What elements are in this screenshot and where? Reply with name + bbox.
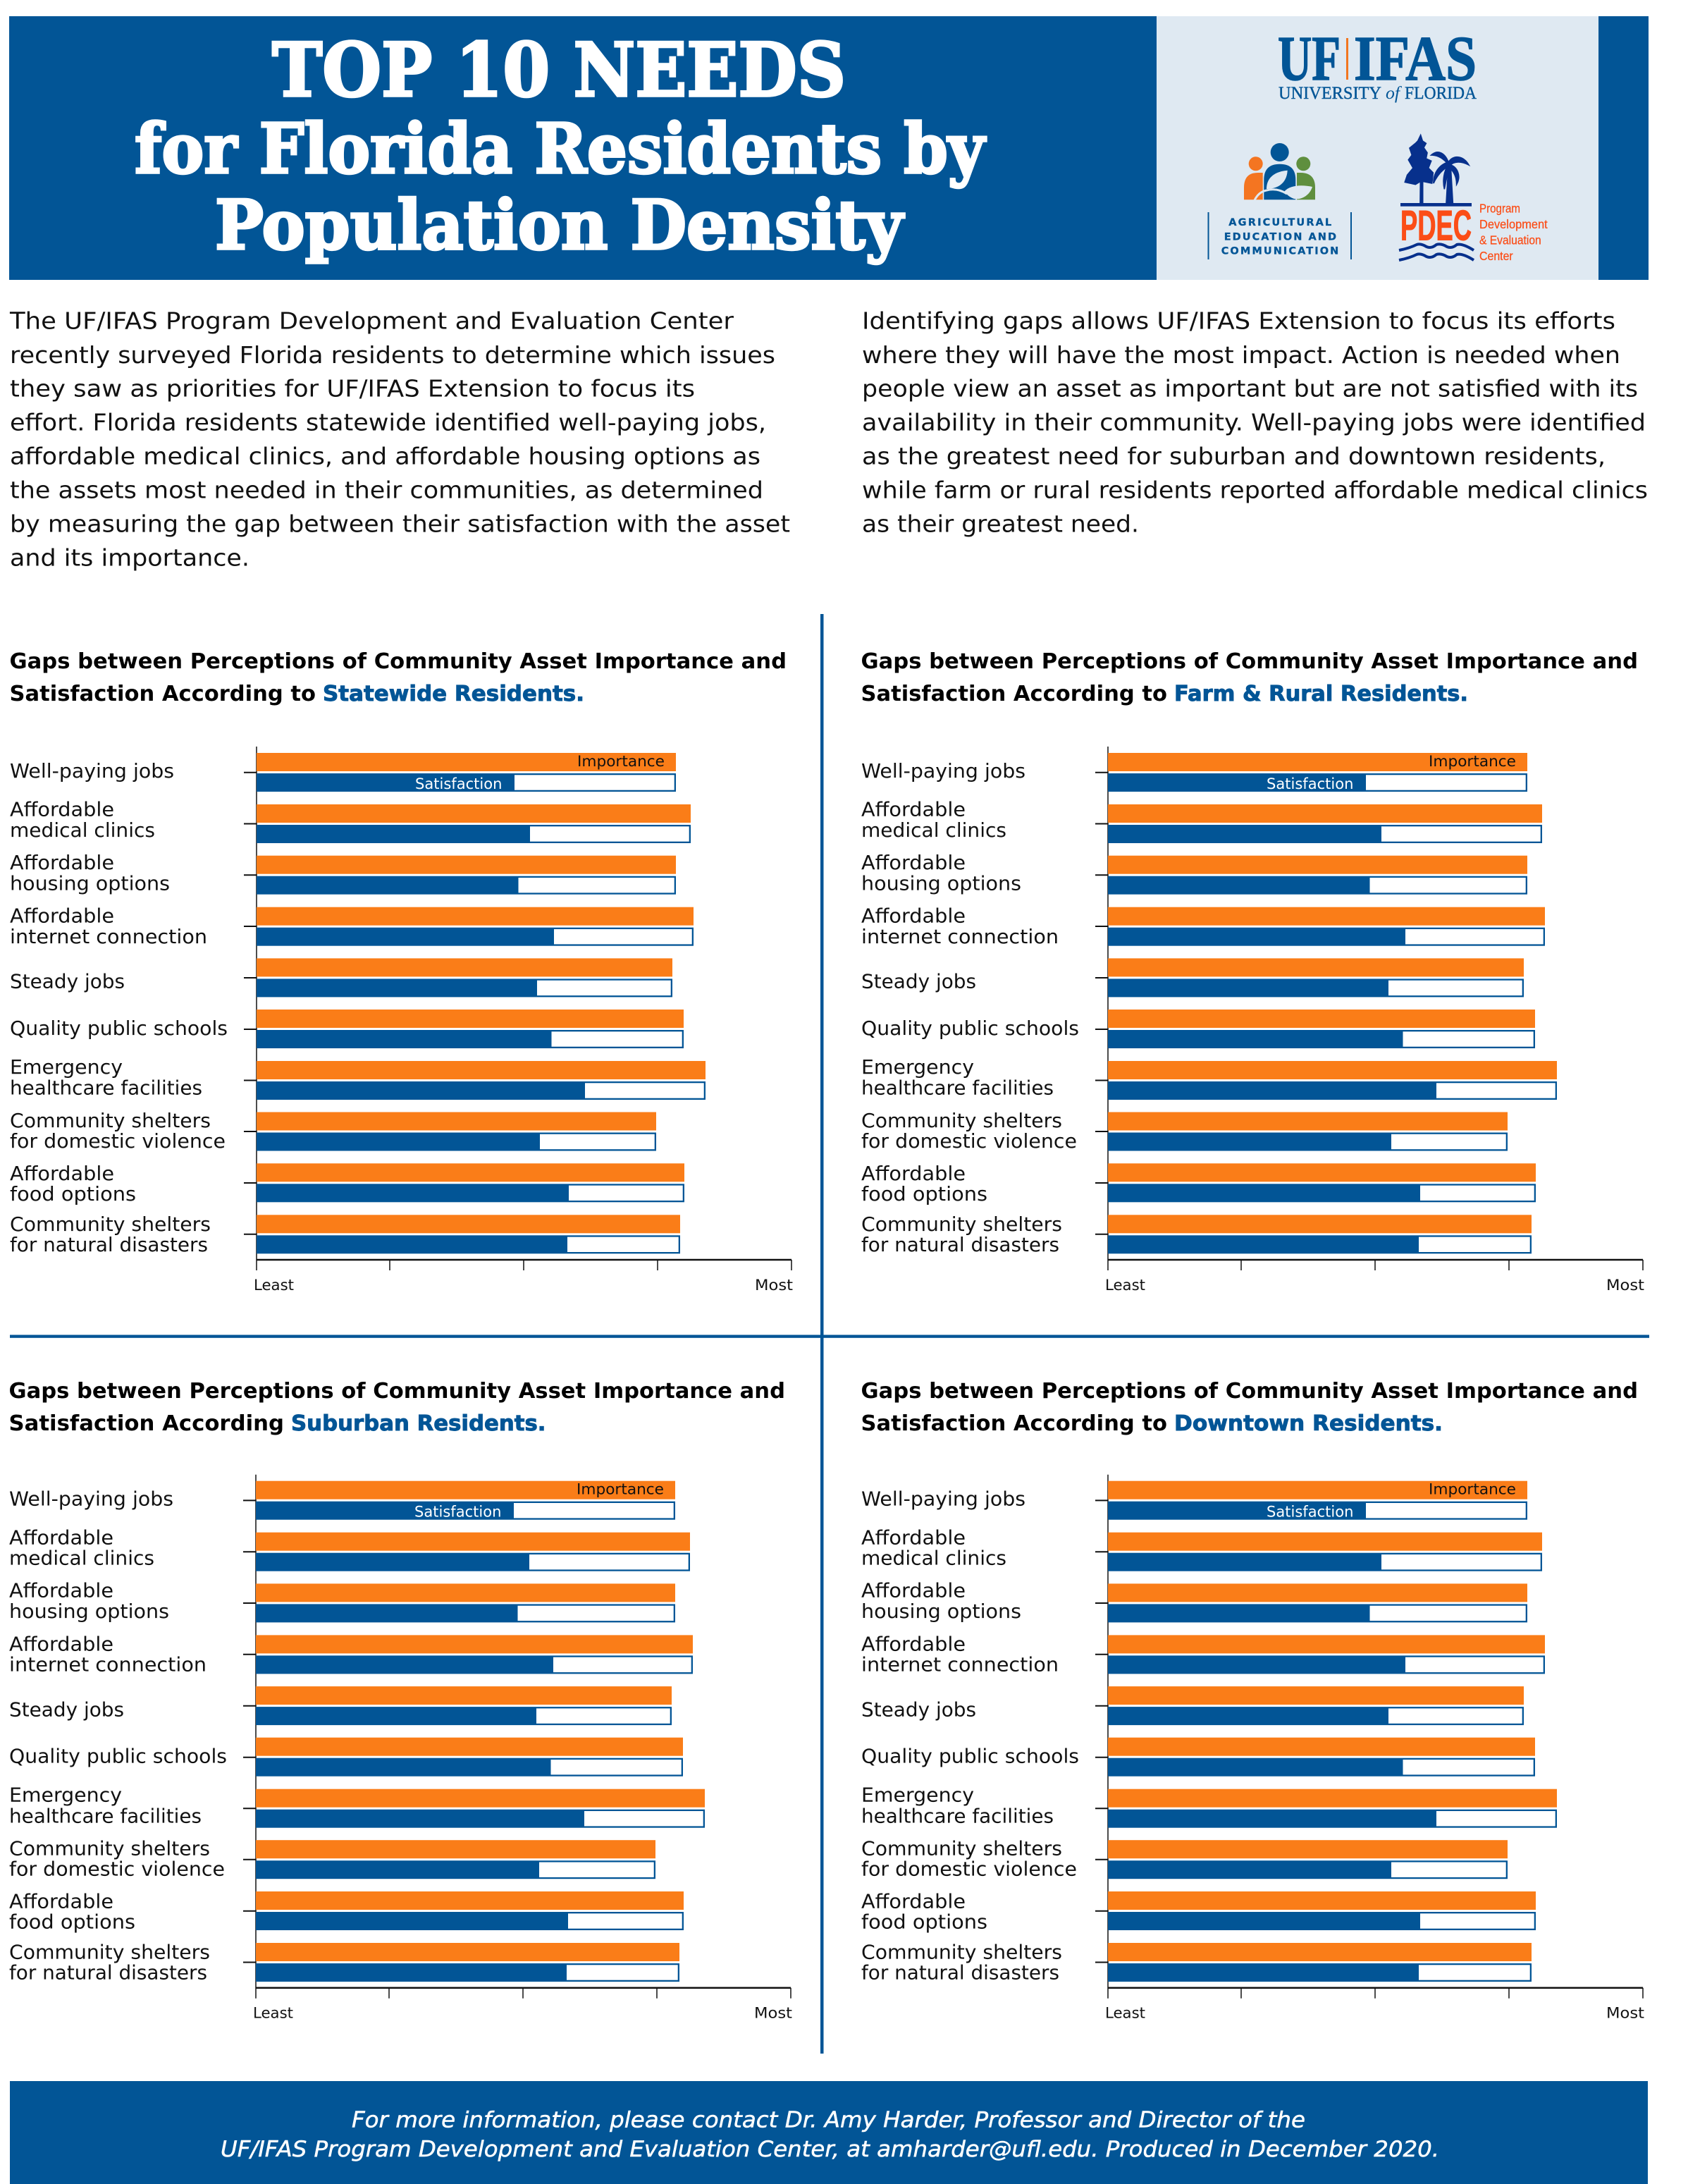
row: affordable internet connection: internet connection xyxy=(861,1654,1059,1676)
intro text: left column: recently surveyed Florida residents to determine which issues xyxy=(10,341,775,369)
axis: Least xyxy=(254,1277,294,1294)
row: emergency healthcare facilities: Emergency xyxy=(861,1056,974,1079)
intro text: right column: availability in their community. Well-paying jobs were identified xyxy=(862,408,1646,436)
heading: statewide: Satisfaction According to xyxy=(10,682,316,706)
row: affordable medical clinics xyxy=(861,799,1542,843)
row: well-paying jobs xyxy=(9,1481,675,1521)
intro text: right column: Identifying gaps allows UF/IFAS Extension to focus its efforts xyxy=(862,307,1615,335)
row: affordable food options: food options xyxy=(861,1911,987,1934)
row: quality public schools: Quality public schools xyxy=(9,1746,227,1768)
row: community shelters for natural disasters: for natural disasters xyxy=(10,1234,208,1256)
row: affordable medical clinics: Affordable xyxy=(10,799,114,821)
row: emergency healthcare facilities xyxy=(9,1784,705,1828)
row: affordable housing options: housing options xyxy=(9,1600,169,1623)
logo: UF IFAS xyxy=(1278,24,1477,103)
heading: suburban: Suburban Residents. xyxy=(291,1411,546,1436)
heading: farm and rural: Gaps between Perceptions of Community Asset Importance and xyxy=(861,649,1638,674)
row: well-paying jobs: Well-paying jobs xyxy=(861,1488,1025,1511)
row: community shelters for domestic violence xyxy=(861,1110,1508,1153)
row: community shelters for natural disasters: Community shelters xyxy=(10,1213,211,1236)
row: affordable food options: Affordable xyxy=(10,1162,114,1185)
intro text: left column: and its importance. xyxy=(10,544,249,571)
intro text: right column: while farm or rural residents reported affordable medical clinics xyxy=(862,477,1648,504)
footer: UF/IFAS Program Development and Evaluation Center, at amharder@ufl.edu. Produced in December 2020. xyxy=(221,2137,1439,2162)
row: affordable housing options: Affordable xyxy=(861,1580,966,1602)
logo: Agricultural Education and Communication: AGRICULTURAL xyxy=(1228,217,1331,228)
logo: UF IFAS: UF xyxy=(1278,24,1341,94)
row: affordable internet connection xyxy=(861,905,1545,948)
row: emergency healthcare facilities: Emergency xyxy=(10,1056,123,1079)
row: community shelters for natural disasters xyxy=(10,1213,680,1256)
row: community shelters for natural disasters xyxy=(861,1941,1532,1984)
intro text: right column xyxy=(862,307,1648,537)
row: steady jobs xyxy=(861,1686,1524,1725)
row: affordable medical clinics xyxy=(861,1526,1542,1571)
row: affordable food options: food options xyxy=(861,1183,987,1206)
row: affordable food options: food options xyxy=(9,1911,135,1934)
logo: PDEC: PDEC xyxy=(1400,202,1472,250)
intro text: left column: effort. Florida residents statewide identified well-paying jobs, xyxy=(10,408,766,436)
row: affordable food options: Affordable xyxy=(861,1891,966,1913)
row: steady jobs xyxy=(861,958,1524,997)
row: affordable food options xyxy=(861,1162,1536,1206)
row: community shelters for natural disasters: Community shelters xyxy=(9,1941,210,1964)
panel: suburban residents xyxy=(8,1379,792,2022)
heading: farm and rural: Farm & Rural Residents. xyxy=(1174,682,1468,706)
intro text: right column: as their greatest need. xyxy=(862,510,1139,537)
row: affordable internet connection: Affordable xyxy=(10,905,114,928)
row: well-paying jobs: Importance xyxy=(1429,1481,1516,1498)
row: emergency healthcare facilities: healthcare facilities xyxy=(9,1805,202,1827)
heading: downtown: Gaps between Perceptions of Community Asset Importance and xyxy=(861,1379,1638,1404)
row: affordable medical clinics: Affordable xyxy=(861,799,966,821)
logo: PDEC xyxy=(1399,135,1548,263)
row: affordable medical clinics: Affordable xyxy=(861,1526,966,1549)
intro text: left column: affordable medical clinics, and affordable housing options as xyxy=(10,442,760,470)
row: well-paying jobs: Importance xyxy=(577,1481,664,1498)
heading: farm and rural: Satisfaction According to xyxy=(861,682,1167,706)
axis: Most xyxy=(754,2005,792,2022)
row: community shelters for domestic violence xyxy=(9,1838,655,1881)
row: community shelters for natural disasters: for natural disasters xyxy=(861,1234,1059,1256)
row: affordable internet connection: internet connection xyxy=(10,926,207,948)
row: well-paying jobs xyxy=(861,753,1527,792)
row: quality public schools xyxy=(10,1010,684,1048)
axis xyxy=(1105,747,1644,1294)
row: affordable medical clinics: medical clinics xyxy=(861,1547,1006,1570)
footer: For more information, please contact Dr. Amy Harder, Professor and Director of the xyxy=(352,2108,1305,2133)
row: well-paying jobs xyxy=(861,1481,1527,1521)
panel: downtown residents xyxy=(861,1379,1644,2022)
axis xyxy=(1105,1475,1644,2022)
row: steady jobs xyxy=(10,958,672,997)
row: well-paying jobs: Satisfaction xyxy=(415,775,502,792)
row: affordable housing options xyxy=(10,852,676,895)
row: community shelters for domestic violence: Community shelters xyxy=(861,1838,1062,1860)
heading: farm and rural xyxy=(861,649,1638,706)
title: Population Density xyxy=(215,185,905,265)
row: quality public schools xyxy=(861,1738,1535,1777)
row: affordable internet connection xyxy=(9,1633,693,1676)
logo: UF IFAS: FLORIDA xyxy=(1405,84,1477,103)
axis xyxy=(253,1475,792,2022)
row: community shelters for domestic violence xyxy=(10,1110,656,1153)
logo: Agricultural Education and Communication: EDUCATION AND xyxy=(1224,232,1336,243)
axis: Least xyxy=(1105,1277,1145,1294)
row: affordable medical clinics: medical clinics xyxy=(861,819,1006,842)
bar chart: farm and rural xyxy=(861,747,1644,1294)
row: affordable food options: food options xyxy=(10,1183,136,1206)
row: well-paying jobs: Satisfaction xyxy=(414,1504,502,1521)
row: steady jobs: Steady jobs xyxy=(9,1698,124,1721)
logo panel xyxy=(1157,16,1598,280)
heading: suburban: Gaps between Perceptions of Community Asset Importance and xyxy=(8,1379,785,1404)
row: well-paying jobs: Well-paying jobs xyxy=(9,1488,173,1511)
row: affordable housing options: housing options xyxy=(10,873,170,895)
row: well-paying jobs: Well-paying jobs xyxy=(10,760,174,783)
title: TOP 10 NEEDS xyxy=(272,26,846,114)
intro text: left column xyxy=(9,307,790,571)
logo: Agricultural Education and Communication: COMMUNICATION xyxy=(1221,246,1338,257)
axis: Most xyxy=(1606,2005,1644,2022)
row: affordable housing options xyxy=(861,852,1527,895)
row: community shelters for natural disasters xyxy=(861,1213,1532,1256)
row: quality public schools xyxy=(861,1010,1535,1048)
row: well-paying jobs: Satisfaction xyxy=(1267,1504,1353,1521)
row: affordable housing options xyxy=(9,1580,675,1623)
row: affordable food options xyxy=(9,1891,684,1934)
heading: downtown: Satisfaction According to xyxy=(861,1411,1167,1436)
row: affordable medical clinics: medical clinics xyxy=(9,1547,154,1570)
row: quality public schools: Quality public schools xyxy=(861,1017,1079,1040)
intro text: left column: the assets most needed in their communities, as determined xyxy=(10,477,763,504)
row: community shelters for domestic violence: Community shelters xyxy=(9,1838,210,1860)
row: affordable medical clinics xyxy=(9,1526,690,1571)
footer xyxy=(10,2081,1648,2184)
logo: UF IFAS: UNIVERSITY xyxy=(1279,84,1381,103)
intro text: right column: as the greatest need for suburban and downtown residents, xyxy=(862,442,1606,470)
logo: UF IFAS: of xyxy=(1386,84,1402,103)
row: affordable internet connection xyxy=(10,905,694,948)
row: affordable internet connection: internet connection xyxy=(9,1654,207,1676)
bar chart: downtown xyxy=(861,1475,1644,2022)
row: affordable medical clinics: Affordable xyxy=(9,1526,113,1549)
row: steady jobs: Steady jobs xyxy=(861,971,976,993)
heading: downtown: Downtown Residents. xyxy=(1174,1411,1443,1436)
row: community shelters for natural disasters: Community shelters xyxy=(861,1213,1062,1236)
row: affordable internet connection: Affordable xyxy=(9,1633,113,1655)
row: affordable internet connection: internet connection xyxy=(861,926,1059,948)
row: affordable internet connection: Affordable xyxy=(861,905,966,928)
row: steady jobs xyxy=(9,1686,672,1725)
heading: statewide: Gaps between Perceptions of Community Asset Importance and xyxy=(10,649,787,674)
logo: PDEC: Center xyxy=(1479,249,1513,263)
axis: Least xyxy=(253,2005,293,2022)
row: steady jobs: Steady jobs xyxy=(10,971,125,993)
row: affordable housing options: Affordable xyxy=(10,852,114,874)
axis: Least xyxy=(1105,2005,1145,2022)
row: emergency healthcare facilities xyxy=(861,1784,1557,1828)
row: well-paying jobs: Well-paying jobs xyxy=(861,760,1025,783)
axis: Most xyxy=(1606,1277,1644,1294)
row: affordable housing options: housing options xyxy=(861,873,1021,895)
row: affordable medical clinics: medical clinics xyxy=(10,819,155,842)
row: affordable housing options: housing options xyxy=(861,1600,1021,1623)
row: emergency healthcare facilities xyxy=(861,1056,1557,1100)
intro text: left column: by measuring the gap between their satisfaction with the asset xyxy=(10,510,790,537)
row: emergency healthcare facilities: healthcare facilities xyxy=(861,1805,1054,1827)
row: well-paying jobs: Satisfaction xyxy=(1267,775,1353,792)
heading: statewide xyxy=(10,649,787,706)
axis xyxy=(254,747,793,1294)
row: community shelters for natural disasters: for natural disasters xyxy=(861,1962,1059,1984)
row: affordable food options: Affordable xyxy=(9,1891,113,1913)
row: steady jobs: Steady jobs xyxy=(861,1698,976,1721)
row: well-paying jobs: Importance xyxy=(1429,753,1516,770)
row: community shelters for domestic violence xyxy=(861,1838,1508,1881)
heading: statewide: Statewide Residents. xyxy=(323,682,584,706)
row: community shelters for domestic violence: for domestic violence xyxy=(861,1858,1077,1881)
bar chart: statewide xyxy=(10,747,793,1294)
intro text: right column: where they will have the most impact. Action is needed when xyxy=(862,341,1620,369)
bar chart: suburban xyxy=(9,1475,792,2022)
row: community shelters for domestic violence: Community shelters xyxy=(10,1110,211,1132)
row: emergency healthcare facilities: healthcare facilities xyxy=(861,1077,1054,1100)
row: affordable housing options: Affordable xyxy=(9,1580,113,1602)
row: emergency healthcare facilities: Emergency xyxy=(861,1784,974,1807)
row: community shelters for domestic violence: for domestic violence xyxy=(861,1130,1077,1153)
row: emergency healthcare facilities: healthcare facilities xyxy=(10,1077,202,1100)
row: well-paying jobs: Importance xyxy=(577,753,665,770)
intro text: right column: people view an asset as important but are not satisfied with its xyxy=(862,375,1638,403)
logo: Agricultural Education and Communication xyxy=(1208,143,1352,259)
row: emergency healthcare facilities: Emergency xyxy=(9,1784,122,1807)
row: community shelters for natural disasters: Community shelters xyxy=(861,1941,1062,1964)
row: well-paying jobs xyxy=(10,753,676,792)
row: affordable medical clinics xyxy=(10,799,691,843)
row: affordable internet connection: Affordable xyxy=(861,1633,966,1655)
logo: PDEC: Program xyxy=(1479,202,1520,216)
row: quality public schools: Quality public schools xyxy=(861,1746,1079,1768)
row: affordable housing options: Affordable xyxy=(861,852,966,874)
panel: statewide residents xyxy=(10,649,793,1294)
row: affordable housing options xyxy=(861,1580,1527,1623)
row: community shelters for domestic violence: for domestic violence xyxy=(10,1130,226,1153)
title: for Florida Residents by xyxy=(135,109,986,189)
row: community shelters for natural disasters xyxy=(9,1941,679,1984)
logo: UF IFAS: IFAS xyxy=(1354,24,1477,94)
heading: suburban xyxy=(8,1379,785,1436)
logo: PDEC: Development xyxy=(1479,217,1548,231)
row: quality public schools: Quality public schools xyxy=(10,1017,228,1040)
row: community shelters for domestic violence: Community shelters xyxy=(861,1110,1062,1132)
header banner xyxy=(9,16,1649,280)
row: affordable internet connection xyxy=(861,1633,1545,1676)
title xyxy=(135,26,986,265)
axis: Most xyxy=(755,1277,793,1294)
logo: PDEC: & Evaluation xyxy=(1479,233,1541,247)
intro text: left column: The UF/IFAS Program Development and Evaluation Center xyxy=(9,307,734,335)
heading: suburban: Satisfaction According xyxy=(8,1411,284,1436)
row: community shelters for natural disasters: for natural disasters xyxy=(9,1962,207,1984)
intro text: left column: they saw as priorities for UF/IFAS Extension to focus its xyxy=(10,375,695,403)
row: affordable food options xyxy=(10,1162,684,1206)
panel: farm and rural residents xyxy=(861,649,1644,1294)
row: community shelters for domestic violence: for domestic violence xyxy=(9,1858,225,1881)
row: emergency healthcare facilities xyxy=(10,1056,706,1100)
row: affordable food options: Affordable xyxy=(861,1162,966,1185)
heading: downtown xyxy=(861,1379,1638,1436)
row: quality public schools xyxy=(9,1738,683,1777)
row: affordable food options xyxy=(861,1891,1536,1934)
